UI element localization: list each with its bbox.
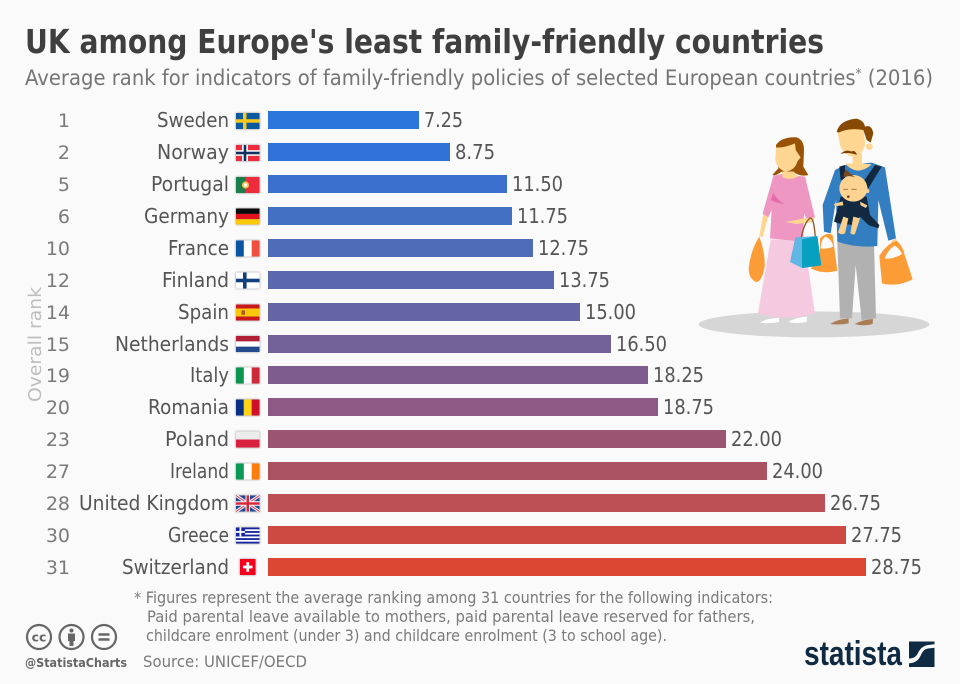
- icon: flag of Norway: [236, 145, 260, 161]
- icon: flag of Finland: [236, 272, 260, 288]
- bar: [268, 462, 767, 480]
- value: 16.50: [616, 332, 667, 356]
- statista logo mark: [909, 642, 934, 667]
- rank: 1: [58, 110, 70, 132]
- row: Sweden: [58, 108, 463, 132]
- bar: [268, 143, 450, 161]
- rank: 15: [46, 334, 70, 356]
- title: UK among Europe's least family-friendly countries: [25, 22, 824, 61]
- value: 27.75: [851, 523, 902, 547]
- rank: 30: [46, 525, 70, 547]
- value: 12.75: [538, 236, 589, 260]
- subtitle: (2016): [862, 66, 933, 91]
- country label: Portugal: [151, 172, 229, 196]
- country label: Spain: [178, 300, 229, 324]
- value: 18.75: [663, 395, 714, 419]
- value: 11.75: [517, 204, 568, 228]
- bar: [268, 175, 507, 193]
- icon: cc: cc: [32, 630, 46, 644]
- icon: flag of Italy: [236, 368, 260, 384]
- shopping bag: blue bag: [790, 218, 821, 268]
- country label: Norway: [157, 140, 229, 164]
- row: Spain: [46, 300, 636, 324]
- country label: Switzerland: [122, 555, 229, 579]
- country label: Greece: [168, 523, 229, 547]
- rank: 14: [46, 302, 70, 324]
- icon: flag of Spain: [236, 304, 260, 320]
- shopping bag: orange bag behind: [811, 234, 837, 272]
- footnote: childcare enrolment (under 3) and childcare enrolment (3 to school age).: [146, 626, 667, 645]
- bar: [268, 271, 554, 289]
- row: Germany: [58, 204, 568, 228]
- icon: flag of France: [236, 240, 260, 256]
- country label: France: [168, 236, 229, 260]
- value: 24.00: [772, 459, 823, 483]
- country label: Poland: [165, 427, 229, 451]
- footnote: Paid parental leave available to mothers, paid parental leave reserved for fathers,: [147, 607, 755, 626]
- value: 28.75: [871, 555, 922, 579]
- value: 15.00: [585, 300, 636, 324]
- illustration: family shopping: [699, 119, 929, 337]
- icon: flag of Sweden: [236, 113, 260, 129]
- woman: [758, 137, 815, 323]
- icon: flag of the Netherlands: [236, 336, 260, 352]
- bar: [268, 526, 846, 544]
- statista wordmark: statista: [804, 635, 903, 673]
- icon: flag of the United Kingdom: [236, 496, 260, 512]
- value: 13.75: [559, 268, 610, 292]
- bar: [268, 303, 580, 321]
- shopping bag: man's orange bag: [879, 241, 913, 285]
- value: 7.25: [424, 108, 463, 132]
- bar: [268, 239, 533, 257]
- rank: 31: [46, 557, 70, 579]
- country label: Finland: [162, 268, 229, 292]
- icon: flag of Greece: [236, 528, 260, 544]
- icon: no derivatives: [92, 625, 116, 649]
- row: Italy: [46, 363, 704, 387]
- bar: [268, 494, 825, 512]
- rank: 5: [58, 174, 70, 196]
- country label: United Kingdom: [79, 491, 229, 515]
- icon: flag of Poland: [236, 432, 260, 448]
- country label: Sweden: [157, 108, 229, 132]
- rank: 20: [46, 397, 70, 419]
- rank: 10: [46, 238, 70, 260]
- row: Switzerland: [46, 555, 922, 579]
- rank: 28: [46, 493, 70, 515]
- ground shadow: [699, 311, 929, 337]
- bar: [268, 366, 648, 384]
- bar: [268, 335, 611, 353]
- icon: flag of Ireland: [236, 464, 260, 480]
- row: Norway: [58, 140, 495, 164]
- icon: creative commons licence: [27, 625, 116, 649]
- value: 18.25: [653, 363, 704, 387]
- footnote: [134, 588, 773, 645]
- shopping bag: woman's orange bag: [749, 237, 765, 282]
- bar: [268, 207, 512, 225]
- icon: flag of Romania: [236, 400, 260, 416]
- country label: Italy: [190, 363, 229, 387]
- icon: flag of Switzerland: [240, 559, 256, 575]
- rank: 27: [46, 461, 70, 483]
- subtitle: *: [856, 67, 862, 82]
- man: [823, 119, 897, 325]
- row: Greece: [46, 523, 902, 547]
- row: Netherlands: [46, 332, 667, 356]
- value: 8.75: [455, 140, 495, 164]
- country label: Netherlands: [115, 332, 229, 356]
- country label: Romania: [148, 395, 229, 419]
- row: United Kingdom: [46, 491, 881, 515]
- subtitle: Average rank for indicators of family-friendly policies of selected European countries: [25, 66, 936, 91]
- rank: 12: [46, 270, 70, 292]
- bar: [268, 398, 658, 416]
- icon: attribution: [60, 625, 84, 649]
- value: 26.75: [830, 491, 881, 515]
- rank: 19: [46, 365, 70, 387]
- row: Finland: [46, 268, 610, 292]
- rank: 23: [46, 429, 70, 451]
- source: Source: UNICEF/OECD: [143, 652, 307, 671]
- country label: Ireland: [170, 459, 229, 483]
- footnote: * Figures represent the average ranking among 31 countries for the following indicators:: [134, 588, 773, 607]
- value: 11.50: [512, 172, 563, 196]
- rank: 2: [58, 142, 70, 164]
- bar: [268, 111, 419, 129]
- row: Portugal: [58, 172, 563, 196]
- row: Poland: [46, 427, 782, 451]
- handle: @StatistaCharts: [25, 655, 127, 670]
- row: Ireland: [46, 459, 823, 483]
- axis label: overall rank: Overall rank: [25, 286, 46, 402]
- icon: flag of Germany: [236, 208, 260, 224]
- row: Romania: [46, 395, 714, 419]
- bar: [268, 558, 866, 576]
- value: 22.00: [731, 427, 782, 451]
- icon: flag of Portugal: [236, 177, 260, 193]
- rank: 6: [58, 206, 70, 228]
- bar: [268, 430, 726, 448]
- country label: Germany: [144, 204, 229, 228]
- row: France: [46, 236, 589, 260]
